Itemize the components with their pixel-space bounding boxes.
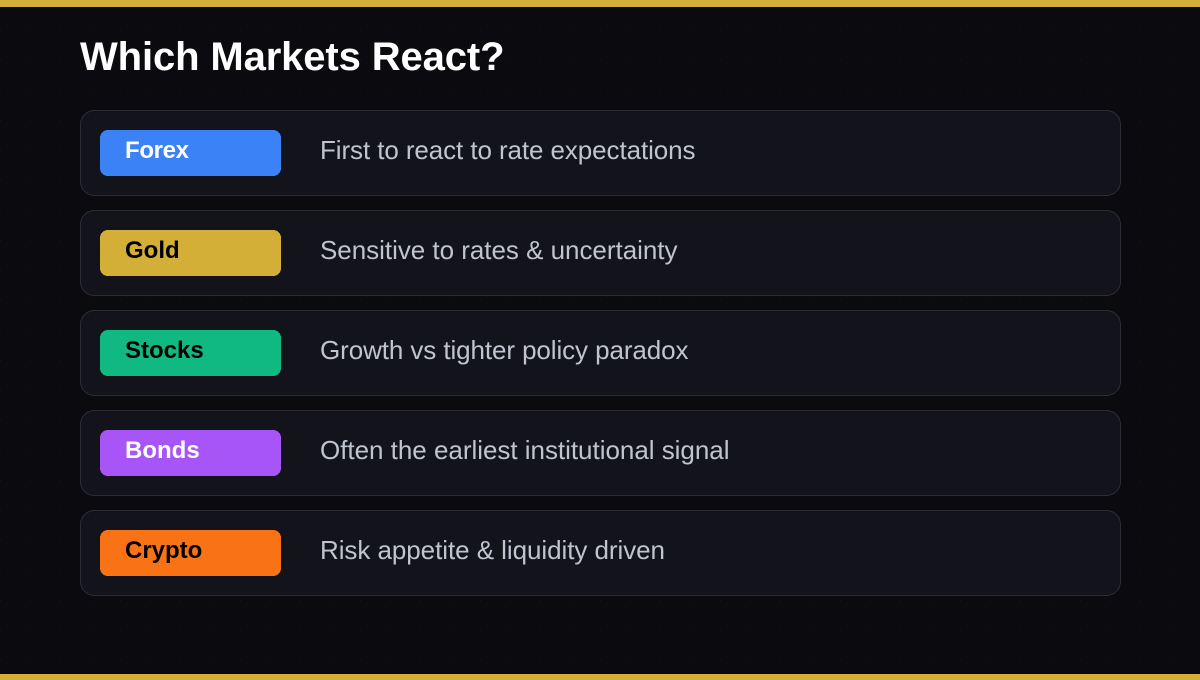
text: forex description: First to react to rate expectations bbox=[320, 135, 696, 165]
badge: bonds bbox=[100, 430, 281, 476]
bottom accent bar bbox=[0, 674, 1200, 680]
text: crypto description: Risk appetite & liquidity driven bbox=[320, 535, 665, 565]
panel: forex row bbox=[80, 110, 1120, 196]
badge: crypto bbox=[100, 530, 281, 576]
text: gold description: Sensitive to rates & uncertainty bbox=[320, 235, 678, 265]
text: stocks description: Growth vs tighter policy paradox bbox=[320, 335, 688, 365]
badge: stocks: Stocks bbox=[125, 337, 204, 364]
badge: gold: Gold bbox=[125, 237, 180, 264]
badge: gold bbox=[100, 230, 281, 276]
title: Which Markets React? bbox=[80, 35, 504, 79]
badge: bonds: Bonds bbox=[125, 437, 200, 464]
panel: stocks row bbox=[80, 310, 1120, 396]
badge: stocks bbox=[100, 330, 281, 376]
panel: gold row bbox=[80, 210, 1120, 296]
text: bonds description: Often the earliest institutional signal bbox=[320, 435, 730, 465]
top accent bar bbox=[0, 0, 1200, 7]
panel: bonds row bbox=[80, 410, 1120, 496]
panel: crypto row bbox=[80, 510, 1120, 596]
badge: forex bbox=[100, 130, 281, 176]
badge: crypto: Crypto bbox=[125, 537, 202, 564]
badge: forex: Forex bbox=[125, 137, 190, 164]
